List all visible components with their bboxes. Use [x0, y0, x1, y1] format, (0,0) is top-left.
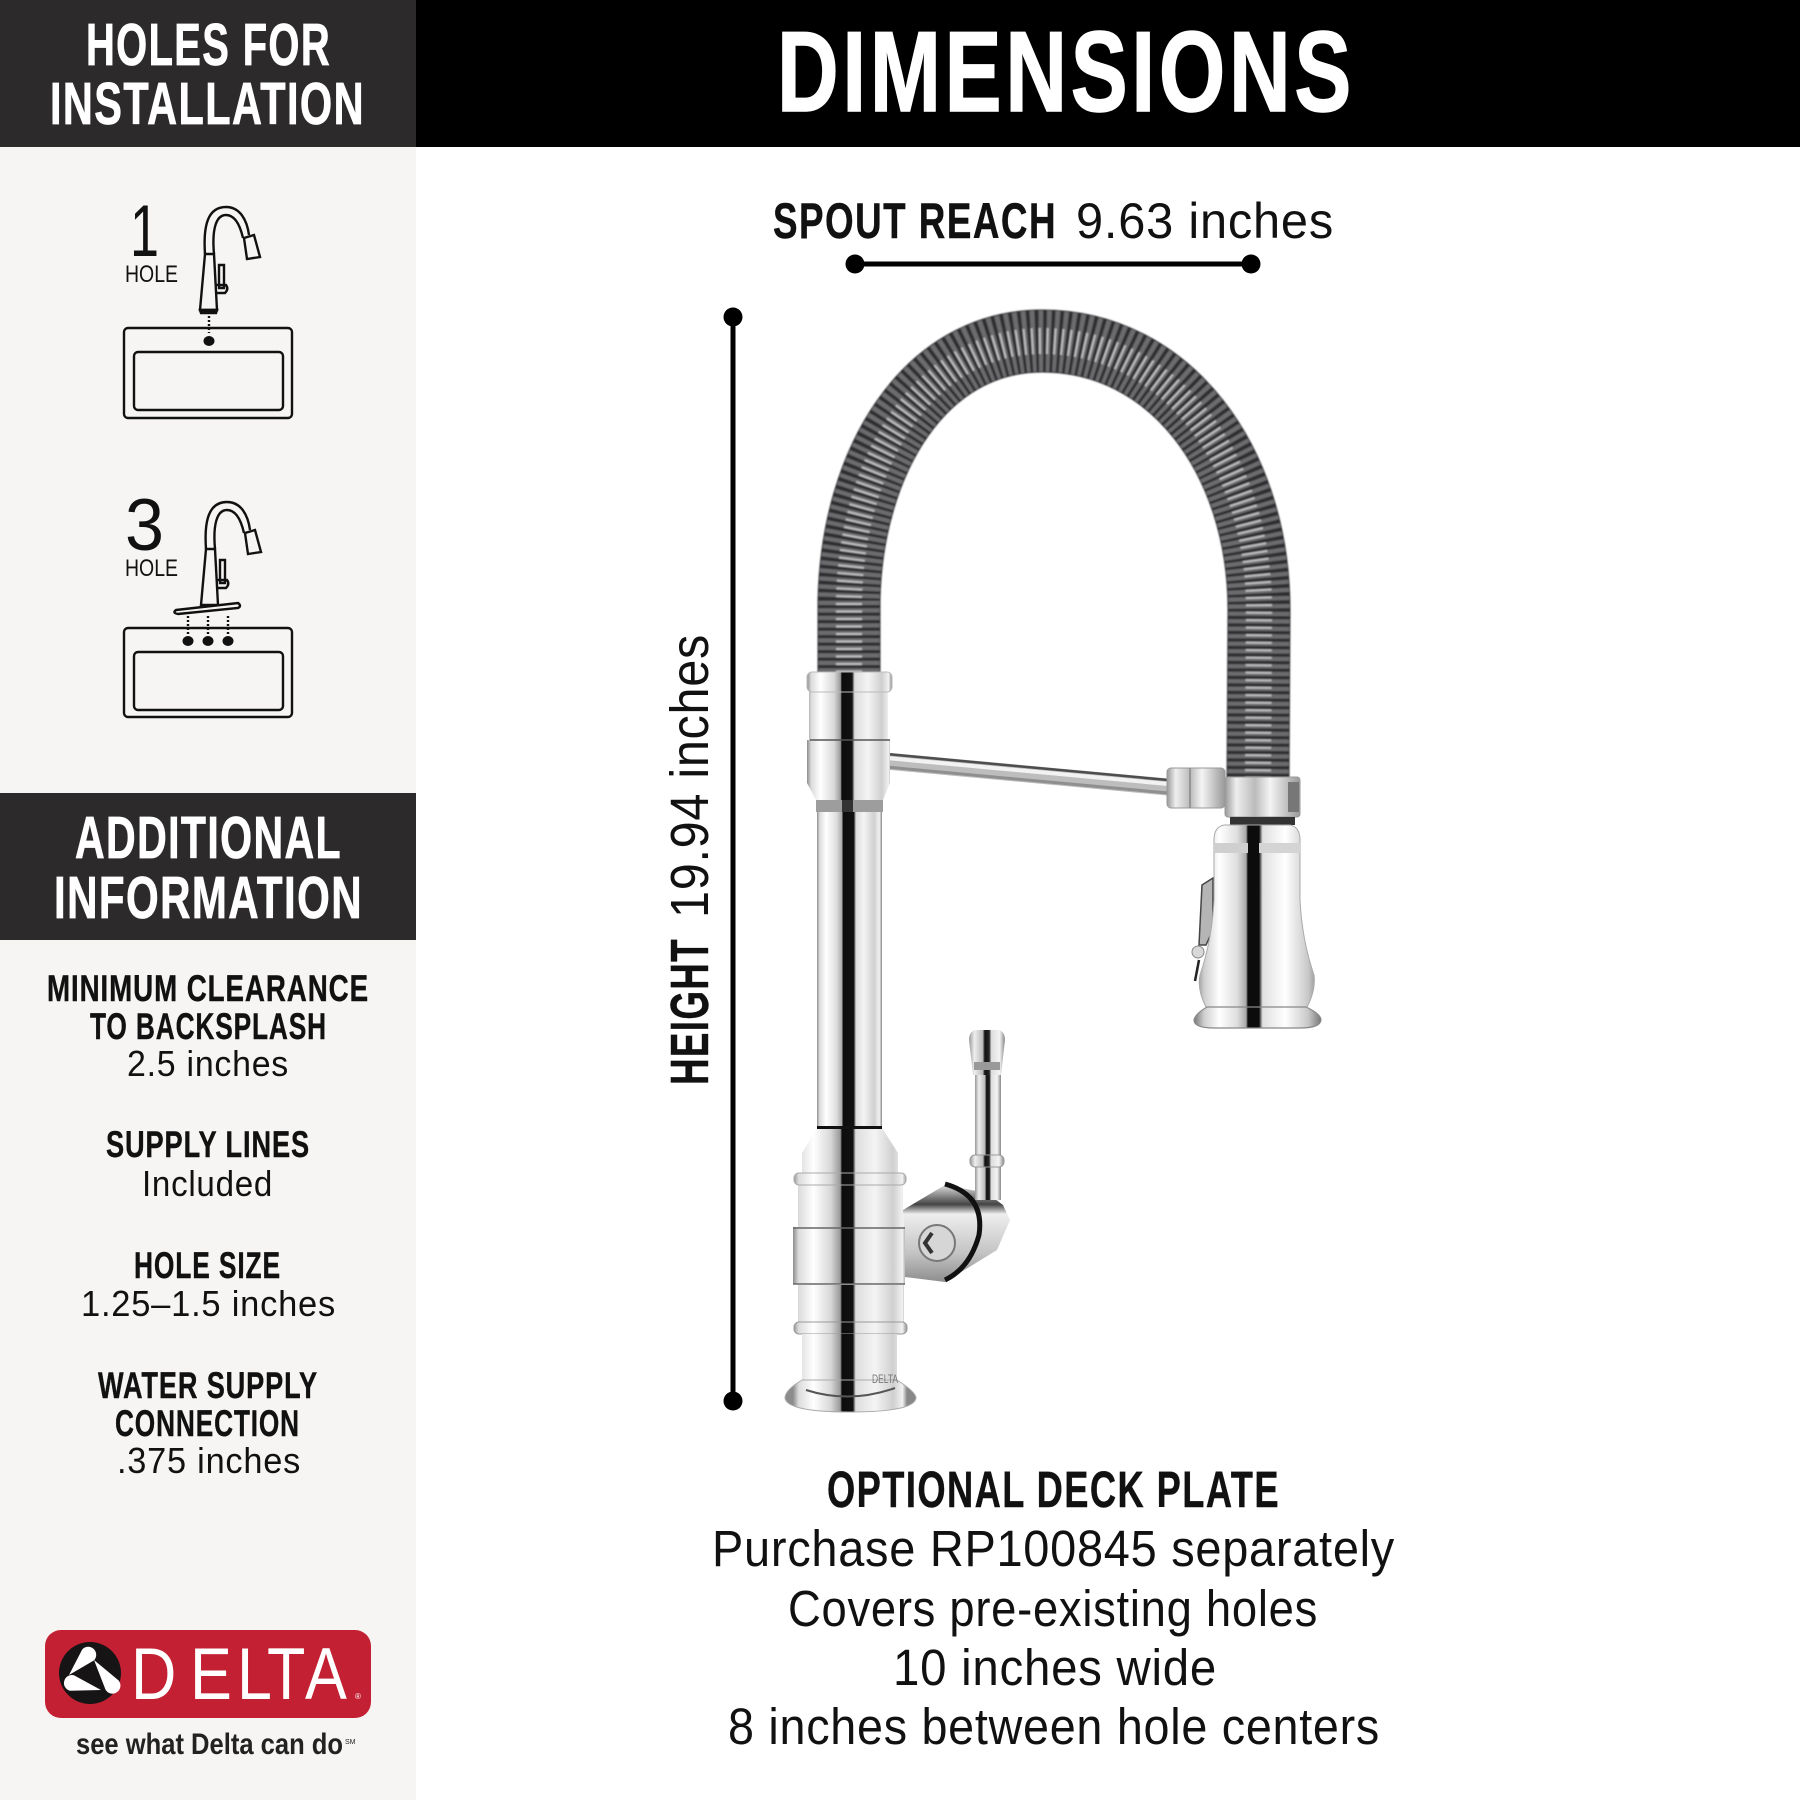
delta logo: ® — [355, 1692, 361, 1701]
text: minimum clearance: MINIMUM CLEARANCE — [47, 968, 369, 1009]
text: hole size: HOLE SIZE — [134, 1245, 281, 1286]
text: minimum clearance: 2.5 inches — [127, 1043, 289, 1084]
base flange — [785, 1380, 916, 1412]
height label: HEIGHT — [660, 938, 720, 1085]
header: additional information — [0, 793, 416, 940]
icon: three hole faucet with deck plate and sink: HOLE — [125, 555, 178, 582]
height label — [660, 634, 720, 1085]
header: dimensions — [416, 0, 1800, 147]
optional deck plate text: OPTIONAL DECK PLATE — [827, 1461, 1280, 1518]
base cone — [802, 1128, 898, 1175]
delta logo: DELTA — [131, 1634, 347, 1715]
delta logo: see what Delta can do — [76, 1728, 343, 1761]
base body with rings — [793, 1126, 907, 1384]
spray head rim — [1194, 1007, 1321, 1028]
header: holes for installation: HOLES FOR — [86, 12, 331, 78]
text: hole size: 1.25–1.5 inches — [81, 1283, 336, 1324]
engraved brand on base: DELTA — [872, 1372, 898, 1386]
header: dimensions: DIMENSIONS — [777, 9, 1355, 136]
header: additional information: INFORMATION — [54, 865, 363, 931]
spray head body — [1199, 825, 1314, 1007]
text: minimum clearance: TO BACKSPLASH — [90, 1006, 327, 1047]
text: supply lines — [106, 1124, 310, 1204]
icon: one hole faucet and sink: 1 — [130, 191, 159, 272]
text: hole size — [81, 1245, 336, 1324]
coiled spring hose — [849, 341, 1259, 780]
spray head trigger — [1192, 878, 1213, 981]
icon: one hole faucet and sink — [124, 191, 292, 418]
upper collar — [807, 672, 892, 812]
spout reach dimension arrow — [846, 254, 1260, 274]
left sidebar panel — [0, 0, 416, 1800]
delta logo: SM — [345, 1739, 356, 1746]
delta logo — [45, 1630, 371, 1761]
optional deck plate text: Covers pre-existing holes — [788, 1580, 1318, 1637]
optional deck plate text: Purchase RP100845 separately — [712, 1520, 1395, 1577]
header: additional information: ADDITIONAL — [75, 805, 342, 871]
icon: one hole faucet and sink: HOLE — [125, 261, 178, 288]
text: supply lines: Included — [142, 1163, 273, 1204]
faucet illustration — [785, 341, 1321, 1412]
icon: three hole faucet with deck plate and sink: 3 — [125, 485, 164, 566]
optional deck plate text — [712, 1461, 1395, 1755]
text: supply lines: SUPPLY LINES — [106, 1124, 310, 1165]
header: holes for installation — [0, 0, 416, 147]
spout reach label: SPOUT REACH — [773, 193, 1057, 249]
height dimension arrow — [724, 308, 742, 1410]
spout reach label: 9.63 inches — [1076, 193, 1334, 249]
optional deck plate text: 8 inches between hole centers — [728, 1698, 1380, 1755]
lever handle — [969, 1030, 1005, 1200]
height label: 19.94 inches — [660, 634, 720, 918]
horizontal support arm — [869, 748, 1225, 808]
text: minimum clearance — [47, 968, 369, 1084]
text: water supply connection: WATER SUPPLY — [98, 1365, 318, 1406]
icon: three hole faucet with deck plate and sink — [124, 485, 292, 717]
optional deck plate text: 10 inches wide — [893, 1639, 1217, 1696]
spout reach label — [773, 193, 1334, 249]
spray head connector — [1225, 777, 1300, 825]
header: holes for installation: INSTALLATION — [50, 71, 365, 137]
handle hub — [903, 1184, 1010, 1282]
text: water supply connection — [98, 1365, 318, 1481]
faucet stem — [817, 810, 882, 1130]
text: water supply connection: CONNECTION — [115, 1403, 300, 1444]
text: water supply connection: .375 inches — [117, 1440, 301, 1481]
